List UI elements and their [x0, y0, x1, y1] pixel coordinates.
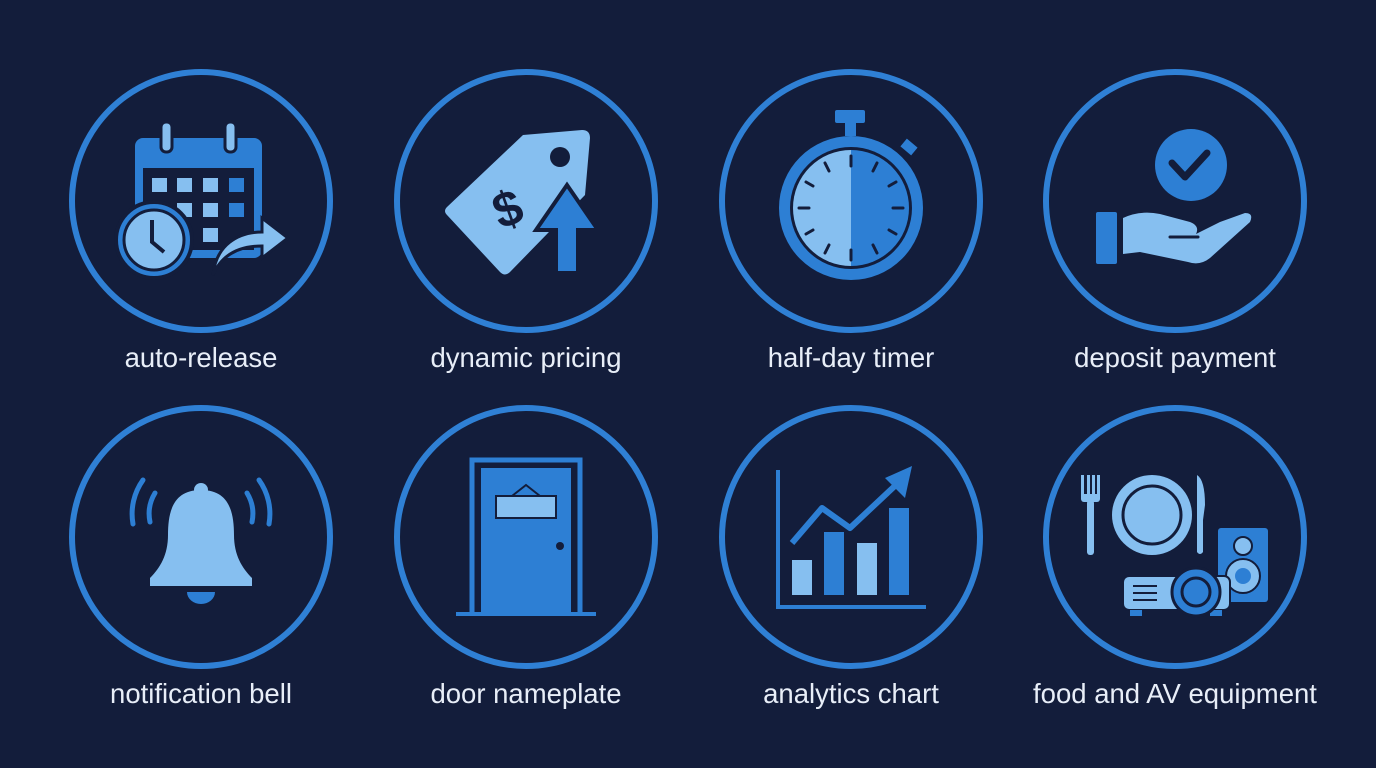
- label: food and AV equipment: [1033, 678, 1317, 709]
- ring: [397, 72, 655, 330]
- icon: door: [456, 460, 596, 614]
- label: half-day timer: [768, 342, 934, 373]
- panel: door nameplate: [397, 408, 655, 709]
- label: dynamic pricing: [430, 342, 622, 373]
- label: notification bell: [110, 678, 292, 709]
- icon: bar chart with trend arrow: [778, 466, 926, 607]
- panel: deposit payment: [1046, 72, 1304, 373]
- ring: [1046, 72, 1304, 330]
- label: auto-release: [125, 342, 277, 373]
- panel: notification bell: [72, 408, 330, 709]
- panel: analytics chart: [722, 408, 980, 709]
- ring: [722, 72, 980, 330]
- icon: calendar with clock and arrow: [116, 122, 288, 278]
- panel: food and AV equipment: [1033, 408, 1317, 709]
- icon: bell: [132, 480, 270, 604]
- ring: [72, 408, 330, 666]
- icon: price tag with up arrow: $: [485, 178, 530, 240]
- ring: [72, 72, 330, 330]
- panel: half-day timer: [722, 72, 980, 373]
- icon: stopwatch: [779, 110, 923, 280]
- panel: dynamic pricing: [397, 72, 655, 373]
- panel: auto-release: [72, 72, 330, 373]
- icon: hand with check: [1096, 129, 1251, 264]
- icon: plate, cutlery, speaker, projector: [1081, 475, 1268, 616]
- label: analytics chart: [763, 678, 939, 709]
- icon: price tag with up arrow: [445, 130, 598, 274]
- ring: [722, 408, 980, 666]
- label: deposit payment: [1074, 342, 1276, 373]
- label: door nameplate: [430, 678, 622, 709]
- ring: [397, 408, 655, 666]
- ring: [1046, 408, 1304, 666]
